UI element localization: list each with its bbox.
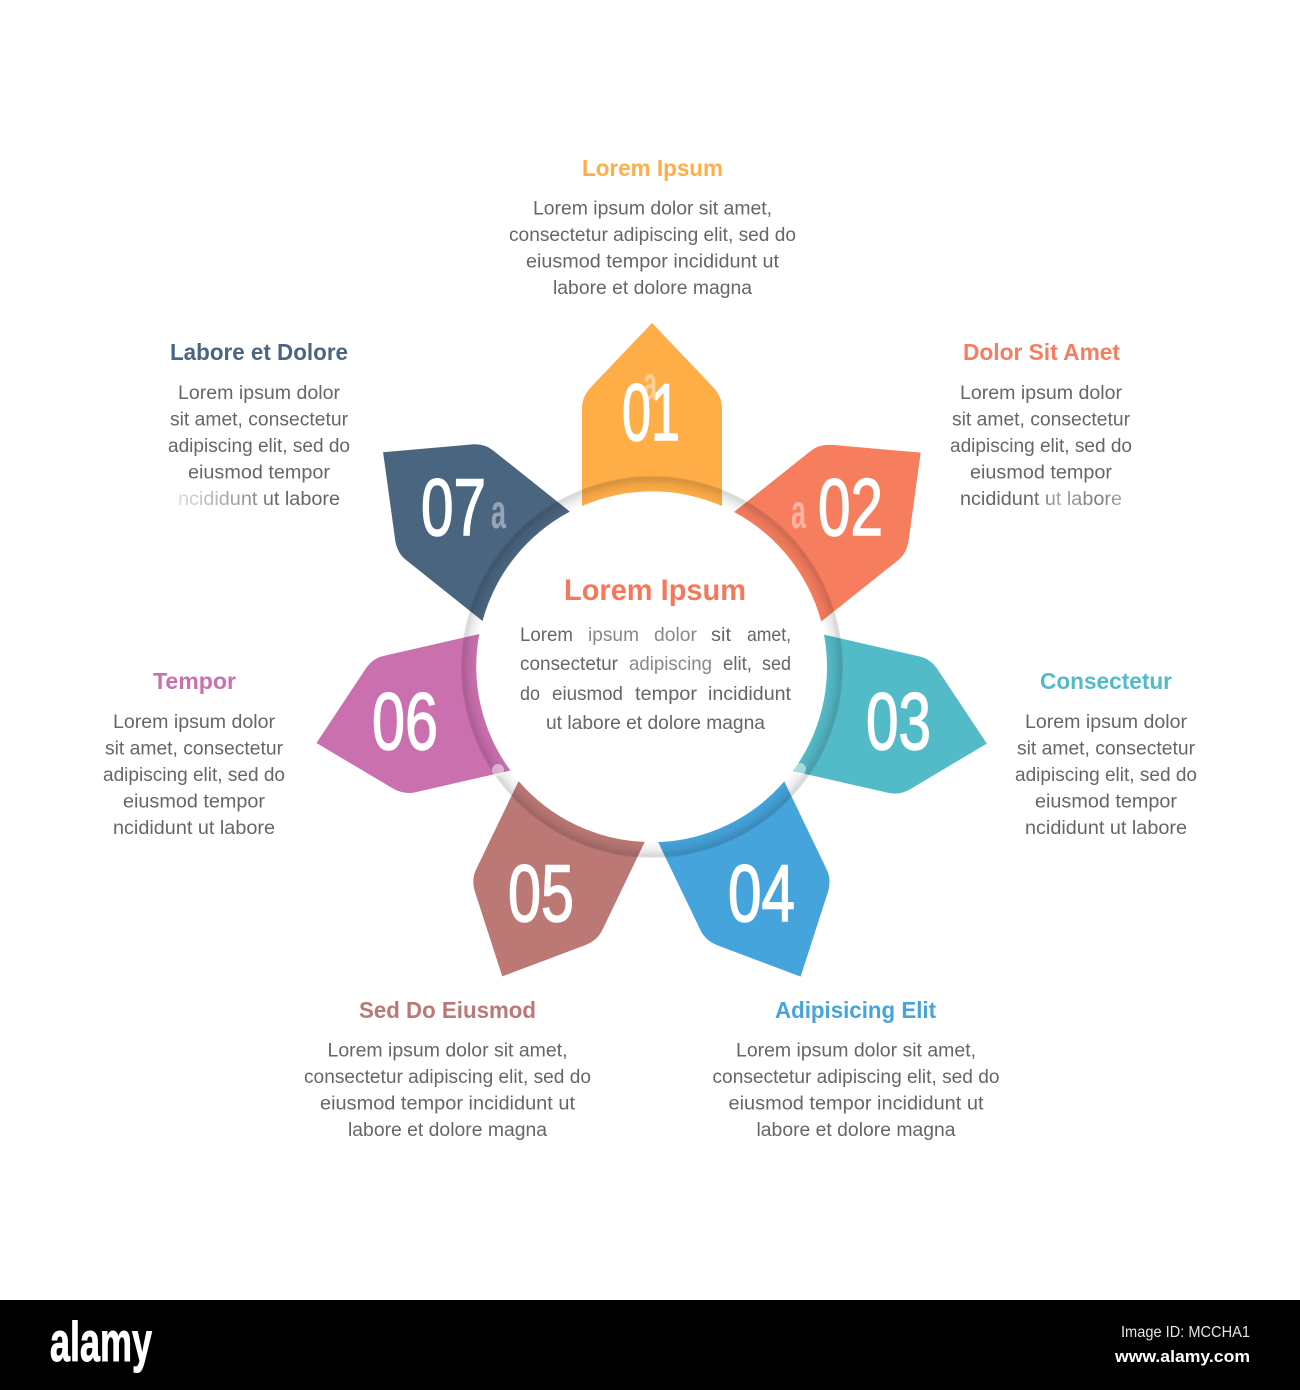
text block 05 bbox=[304, 997, 591, 1141]
text block 07 bbox=[168, 339, 350, 510]
body 01: eiusmod tempor incididunt ut bbox=[526, 252, 780, 272]
body 07: Lorem ipsum dolor bbox=[178, 383, 341, 404]
footer bar bbox=[0, 1300, 1300, 1390]
central paragraph: eiusmod bbox=[552, 683, 623, 705]
text block 06 bbox=[103, 668, 285, 839]
body 07: ncididunt ut labore bbox=[178, 489, 340, 510]
petal 06 pink: 06 bbox=[372, 677, 438, 767]
body 05 bbox=[304, 1040, 591, 1141]
central paragraph: tempor bbox=[635, 683, 698, 705]
text block 04 bbox=[712, 997, 1000, 1141]
body 02 bbox=[950, 383, 1132, 510]
central paragraph: sit bbox=[711, 624, 732, 646]
body 07: adipiscing elit, sed do bbox=[168, 436, 350, 457]
body 06: eiusmod tempor bbox=[123, 792, 266, 812]
body 01 bbox=[509, 198, 796, 299]
text block 02 bbox=[950, 339, 1132, 510]
petal 02 coral: a bbox=[791, 486, 806, 539]
body 07: eiusmod tempor bbox=[188, 462, 331, 484]
petal 01 orange: a bbox=[643, 358, 657, 411]
body 02: sit amet, consectetur bbox=[952, 410, 1131, 430]
body 05: labore et dolore magna bbox=[348, 1120, 547, 1141]
heading 04: Adipisicing Elit bbox=[775, 997, 936, 1023]
heading 05: Sed Do Eiusmod bbox=[359, 997, 536, 1023]
translucent ring bbox=[461, 476, 843, 858]
body 07: sit amet, consectetur bbox=[170, 410, 349, 430]
petal 04 blue bbox=[658, 781, 864, 1007]
body 04: Lorem ipsum dolor sit amet, bbox=[736, 1040, 976, 1062]
petal 05 rose brown bbox=[439, 781, 645, 1007]
central paragraph: do bbox=[520, 683, 540, 705]
heading 06: Tempor bbox=[153, 668, 236, 694]
central paragraph: ut labore et dolore magna bbox=[546, 712, 765, 734]
body 05: eiusmod tempor incididunt ut bbox=[320, 1094, 576, 1114]
central paragraph: adipiscing bbox=[629, 653, 712, 675]
body 06: ncididunt ut labore bbox=[113, 818, 275, 839]
central text block bbox=[520, 574, 792, 734]
central paragraph: amet, bbox=[747, 624, 791, 646]
body 05: Lorem ipsum dolor sit amet, bbox=[328, 1040, 568, 1062]
central paragraph: ipsum bbox=[588, 624, 639, 646]
body 01: labore et dolore magna bbox=[553, 278, 752, 299]
central paragraph: dolor bbox=[654, 624, 697, 646]
petal 05 rose brown: 05 bbox=[508, 849, 574, 939]
text block 03 bbox=[1015, 668, 1197, 839]
body 03: sit amet, consectetur bbox=[1017, 738, 1196, 760]
petal 02 coral bbox=[734, 398, 964, 622]
petal 03 teal bbox=[793, 635, 1002, 812]
central paragraph: elit, bbox=[723, 653, 752, 675]
body 02: eiusmod tempor bbox=[970, 462, 1113, 484]
circular diagram bbox=[301, 323, 1002, 1007]
petal 04 blue: 04 bbox=[728, 849, 795, 939]
central paragraph: Lorem bbox=[520, 624, 573, 646]
body 02: adipiscing elit, sed do bbox=[950, 436, 1132, 457]
body 06: adipiscing elit, sed do bbox=[103, 765, 285, 786]
petal 07 navy: 07 bbox=[421, 463, 486, 553]
alamy logo: alamy bbox=[50, 1310, 152, 1373]
body 04: eiusmod tempor incididunt ut bbox=[728, 1094, 984, 1114]
heading 03: Consectetur bbox=[1040, 668, 1172, 694]
body 03 bbox=[1015, 712, 1197, 839]
text block 01 bbox=[509, 155, 796, 299]
body 03: ncididunt ut labore bbox=[1025, 818, 1187, 839]
body 01: consectetur adipiscing elit, sed do bbox=[509, 225, 796, 246]
petal 07 navy: a bbox=[491, 486, 506, 539]
body 03: Lorem ipsum dolor bbox=[1025, 712, 1188, 733]
petal 01 orange: 01 bbox=[622, 368, 680, 458]
central paragraph: incididunt bbox=[708, 683, 792, 705]
heading 07: Labore et Dolore bbox=[170, 339, 348, 365]
petal 07 navy bbox=[339, 397, 570, 621]
website: www.alamy.com bbox=[1114, 1347, 1250, 1366]
image id: Image ID: MCCHA1 bbox=[1121, 1324, 1250, 1341]
body 04: consectetur adipiscing elit, sed do bbox=[712, 1067, 1000, 1088]
central paragraph: sed bbox=[762, 653, 791, 675]
body 06: Lorem ipsum dolor bbox=[113, 712, 276, 733]
body 04 bbox=[712, 1040, 1000, 1141]
petal 06 pink bbox=[301, 634, 510, 811]
body 02: Lorem ipsum dolor bbox=[960, 383, 1123, 404]
body 04: labore et dolore magna bbox=[756, 1120, 956, 1141]
body 05: consectetur adipiscing elit, sed do bbox=[304, 1067, 591, 1088]
petal 02 coral: 02 bbox=[818, 463, 883, 553]
petal 01 orange bbox=[582, 323, 722, 506]
body 01: Lorem ipsum dolor sit amet, bbox=[533, 198, 772, 220]
body 02: ncididunt ut labore bbox=[960, 489, 1122, 510]
heading 02: Dolor Sit Amet bbox=[963, 339, 1120, 365]
central heading: Lorem Ipsum bbox=[564, 574, 746, 607]
petal 03 teal: 03 bbox=[866, 677, 931, 767]
heading 01: Lorem Ipsum bbox=[582, 155, 723, 181]
central paragraph: consectetur bbox=[520, 653, 618, 675]
body 03: eiusmod tempor bbox=[1035, 792, 1178, 812]
body 03: adipiscing elit, sed do bbox=[1015, 765, 1197, 786]
body 07 bbox=[168, 383, 350, 510]
central paragraph bbox=[520, 624, 792, 734]
body 06 bbox=[103, 712, 285, 839]
body 06: sit amet, consectetur bbox=[105, 738, 284, 760]
